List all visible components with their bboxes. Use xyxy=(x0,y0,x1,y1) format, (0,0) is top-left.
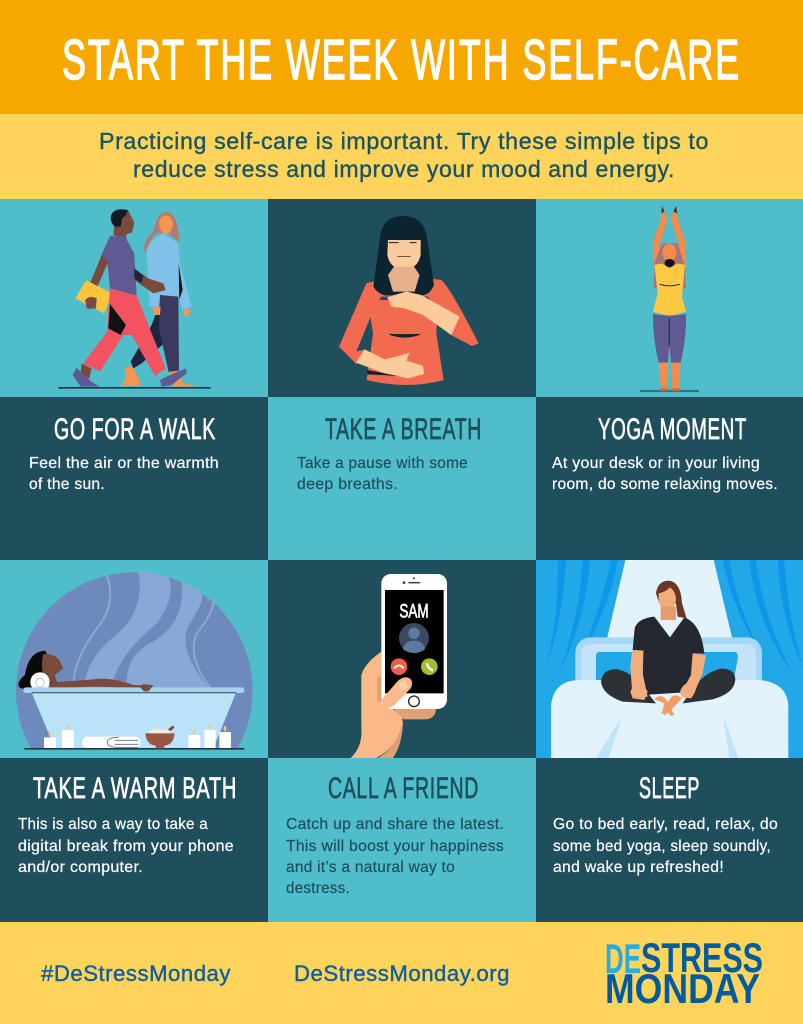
logo xyxy=(605,934,763,1012)
panel: call a friend xyxy=(268,560,536,922)
hashtag: #DeStressMonday xyxy=(41,961,231,986)
body text: At your desk or in your living xyxy=(552,455,760,472)
illustration: woman in bathtub xyxy=(16,571,253,750)
body text: digital break from your phone xyxy=(18,838,234,855)
body text: and wake up refreshed! xyxy=(553,859,724,876)
title banner xyxy=(0,0,803,114)
body text xyxy=(29,455,219,493)
illustration: standing yoga pose xyxy=(640,206,699,392)
body text: and it’s a natural way to xyxy=(286,859,455,876)
intro text band xyxy=(0,114,803,199)
logo: DE xyxy=(605,935,641,982)
body text xyxy=(286,816,504,897)
phone xyxy=(381,574,447,709)
phone: SAM xyxy=(399,601,429,622)
panel: take a warm bath xyxy=(0,560,268,922)
body text: room, do some relaxing moves. xyxy=(552,476,778,493)
body text: This is also a way to take a xyxy=(18,816,208,833)
body text: Catch up and share the latest. xyxy=(286,816,504,833)
body text: This will boost your happiness xyxy=(286,838,504,855)
body text xyxy=(18,816,234,876)
heading: TAKE A BREATH xyxy=(325,413,482,446)
logo: MONDAY xyxy=(605,965,760,1012)
panel: sleep xyxy=(536,560,803,922)
body text: destress. xyxy=(286,880,350,897)
body text: and/or computer. xyxy=(18,859,143,876)
body text: deep breaths. xyxy=(297,476,398,493)
heading: CALL A FRIEND xyxy=(328,772,479,805)
illustration: woman breathing xyxy=(339,216,479,385)
heading: GO FOR A WALK xyxy=(54,413,216,446)
body text: Feel the air or the warmth xyxy=(29,455,219,472)
heading: SLEEP xyxy=(639,772,700,805)
illustration: woman meditating on bed xyxy=(546,560,803,758)
footer band xyxy=(0,922,803,1024)
body text: Take a pause with some xyxy=(297,455,468,472)
intro text band: Practicing self-care is important. Try these simple tips to xyxy=(99,128,709,154)
website: DeStressMonday.org xyxy=(294,961,510,986)
intro text band: reduce stress and improve your mood and energy. xyxy=(133,156,675,182)
body text xyxy=(552,455,778,493)
heading: TAKE A WARM BATH xyxy=(33,772,237,805)
body text: of the sun. xyxy=(29,476,105,493)
body text: some bed yoga, sleep soundly, xyxy=(553,838,771,855)
illustration: couple walking xyxy=(58,209,211,389)
body text: Go to bed early, read, relax, do xyxy=(553,816,778,833)
illustration: hand holding phone xyxy=(351,574,447,758)
body text xyxy=(297,455,468,493)
panel: go for a walk xyxy=(0,199,268,560)
body text xyxy=(553,816,778,876)
panel: yoga moment xyxy=(536,199,803,560)
panel: take a breath xyxy=(268,199,536,560)
